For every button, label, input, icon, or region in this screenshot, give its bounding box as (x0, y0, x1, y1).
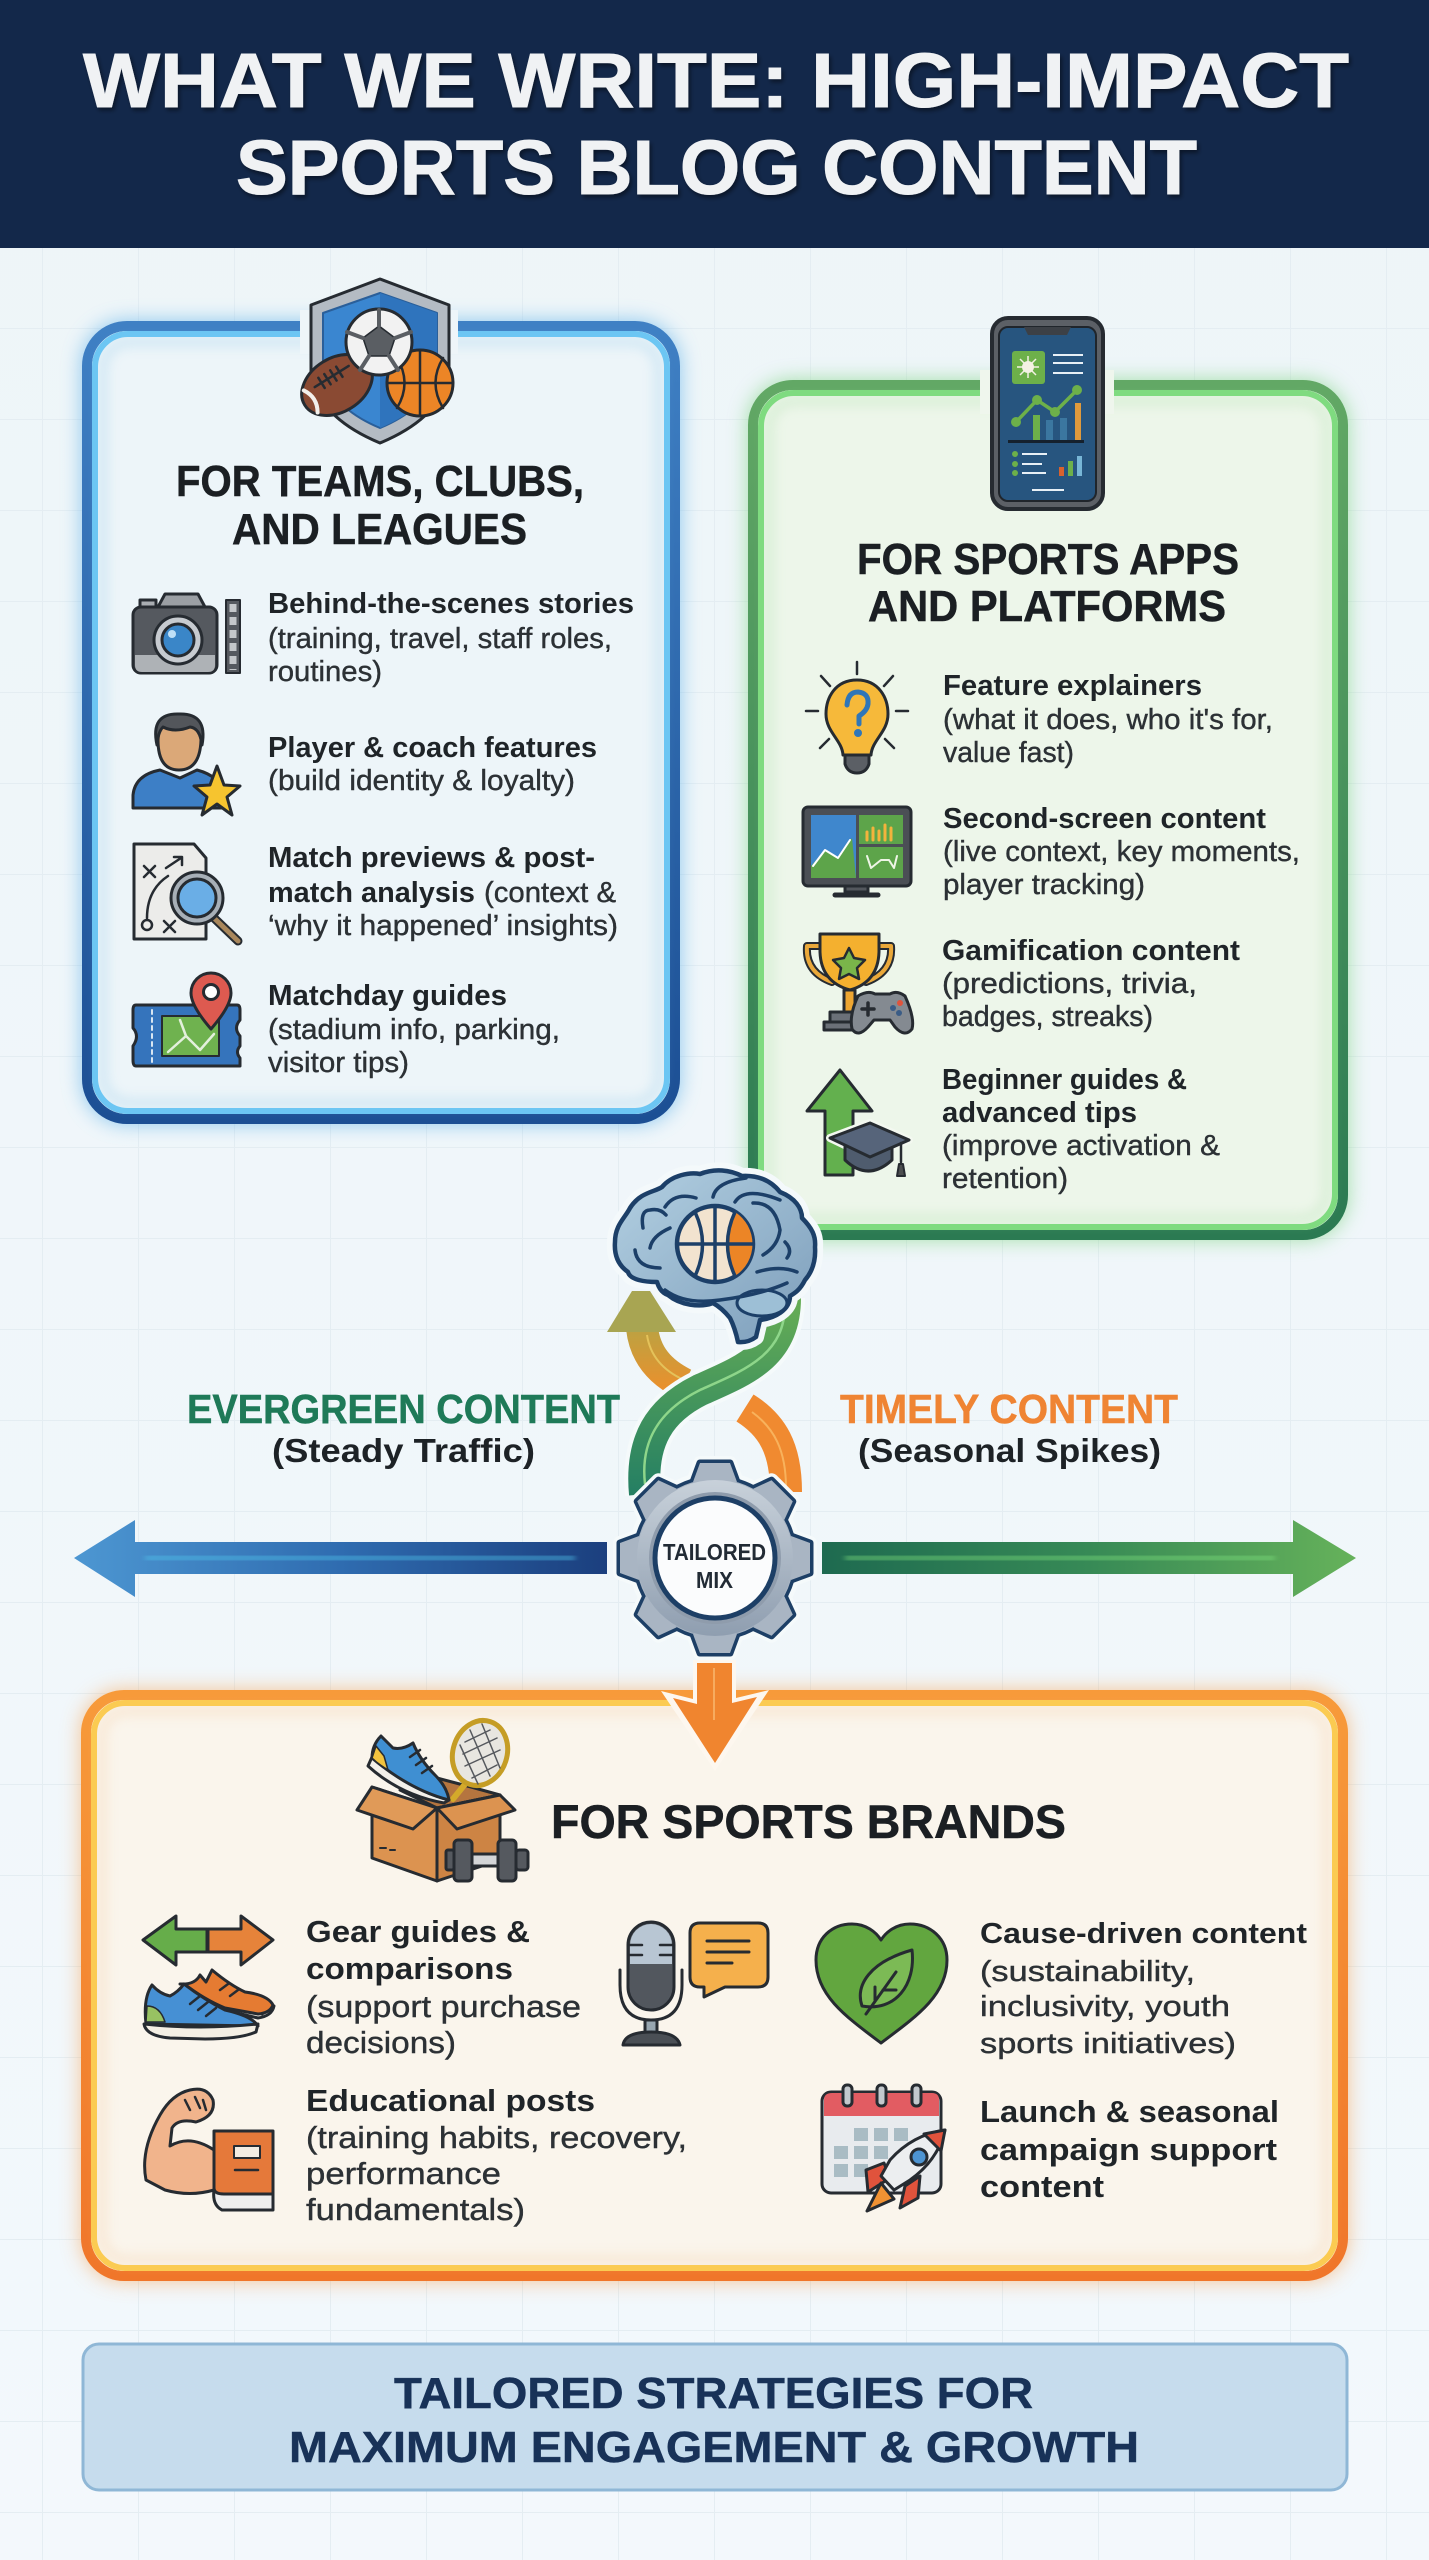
text: beginner guides and advanced tips: Beginner guides & (942, 1064, 1187, 1096)
panel: teams, clubs and leagues (82, 279, 680, 1124)
text: cause-driven content: Cause-driven content (980, 1918, 1307, 1950)
heading: for sports apps and platforms: FOR SPORTS APPS (857, 535, 1239, 584)
arrow: gold strand up to brain (607, 1291, 684, 1384)
text: feature explainers: value fast) (943, 737, 1074, 769)
icon: camera (133, 594, 240, 673)
footer banner: TAILORED STRATEGIES FOR (394, 2369, 1033, 2418)
panel: sports apps and platforms (748, 318, 1348, 1240)
text: gear guides and comparisons (306, 1914, 581, 2060)
label: evergreen content (187, 1386, 620, 1469)
heading: for teams, clubs, and leagues: FOR TEAMS, CLUBS, (176, 457, 584, 506)
arrow: left evergreen (74, 1520, 607, 1597)
text: educational posts: performance (306, 2156, 501, 2191)
panel frame green (748, 370, 1348, 1240)
heading: for sports apps and platforms: AND PLATFORMS (868, 582, 1226, 631)
text: behind-the-scenes stories: Behind-the-scenes stories (268, 588, 634, 620)
icon: comparison arrows and shoes (143, 1916, 274, 2039)
panel frame blue (82, 310, 680, 1124)
icon: trophy and game controller (807, 934, 913, 1033)
text: launch and seasonal campaign support content: Launch & seasonal (980, 2094, 1279, 2129)
icon: brain with basketball (615, 1170, 815, 1342)
strand: green (644, 1298, 785, 1494)
text: player and coach features: Player & coach features (268, 732, 597, 764)
icon: tailored mix gear: TAILORED (663, 1539, 766, 1565)
text: second-screen content: (live context, key moments, (943, 836, 1300, 868)
footer banner: MAXIMUM ENGAGEMENT & GROWTH (289, 2423, 1139, 2472)
text: second-screen content: player tracking) (943, 869, 1145, 901)
text: educational posts (306, 2083, 687, 2227)
icon: light bulb with question mark (806, 662, 908, 773)
heading: for sports brands: FOR SPORTS BRANDS (551, 1795, 1066, 1848)
icon: shield with balls (290, 279, 453, 443)
label: timely content (840, 1386, 1178, 1469)
text: feature explainers: Feature explainers (943, 670, 1202, 702)
label: timely content: (Seasonal Spikes) (858, 1432, 1161, 1469)
header band with title: SPORTS BLOG CONTENT (236, 125, 1197, 211)
text: cause-driven content: (sustainability, (980, 1956, 1195, 1988)
icon: microphone and speech bubble (620, 1922, 768, 2045)
text: beginner guides and advanced tips: advanced tips (942, 1097, 1137, 1129)
text: beginner guides and advanced tips: (improve activation & (942, 1130, 1220, 1162)
strand: orange (745, 1408, 786, 1492)
text: launch and seasonal campaign support content (980, 2094, 1279, 2204)
diagram: tailored mix centre (74, 1170, 1356, 1771)
text: match previews and post-match analysis: (context & (484, 877, 616, 909)
text: launch and seasonal campaign support content: content (980, 2169, 1104, 2204)
arrow: right timely (822, 1520, 1356, 1597)
text: cause-driven content (980, 1918, 1307, 2060)
icon: gear box (357, 1713, 528, 1881)
text: gear guides and comparisons: Gear guides & (306, 1914, 530, 1949)
icon: tailored mix gear (620, 1463, 810, 1653)
label: evergreen content: (Steady Traffic) (272, 1432, 535, 1469)
icon: calendar with rocket (822, 2085, 945, 2211)
text: matchday guides: (stadium info, parking, (268, 1014, 560, 1046)
panel: sports brands (81, 1690, 1348, 2281)
label: evergreen content: EVERGREEN CONTENT (187, 1386, 620, 1432)
icon: green heart with leaf (816, 1924, 947, 2043)
header band with title: WHAT WE WRITE: HIGH-IMPACT (83, 38, 1349, 124)
text: gamification content: badges, streaks) (942, 1001, 1153, 1033)
footer banner (83, 2344, 1347, 2490)
text: gamification content: Gamification content (942, 935, 1240, 967)
icon: monitor with live data (803, 807, 911, 895)
heading: for teams, clubs, and leagues: AND LEAGUES (232, 505, 527, 554)
text: second-screen content: Second-screen content (943, 803, 1266, 835)
icon: ticket map with pin (133, 973, 240, 1066)
text: cause-driven content: sports initiatives) (980, 2028, 1236, 2060)
icon: tactics board with magnifier (134, 844, 238, 941)
text: second-screen content (943, 803, 1300, 901)
text: behind-the-scenes stories (268, 588, 634, 688)
text: match previews and post-match analysis: match analysis (268, 877, 475, 909)
text: match previews and post-match analysis (268, 842, 618, 942)
text: player and coach features: (build identity & loyalty) (268, 765, 575, 797)
text: matchday guides: visitor tips) (268, 1047, 409, 1079)
text: matchday guides (268, 980, 560, 1079)
text: gear guides and comparisons: (support purchase (306, 1989, 581, 2024)
text: feature explainers (943, 670, 1273, 769)
text: gear guides and comparisons: comparisons (306, 1951, 513, 1986)
text: beginner guides and advanced tips: retention) (942, 1163, 1068, 1195)
text: matchday guides: Matchday guides (268, 980, 507, 1012)
text: beginner guides and advanced tips (942, 1064, 1220, 1195)
label: timely content: TIMELY CONTENT (840, 1386, 1178, 1432)
header band with title (0, 0, 1429, 248)
text: behind-the-scenes stories: routines) (268, 656, 382, 688)
text: cause-driven content: inclusivity, youth (980, 1991, 1230, 2023)
text: launch and seasonal campaign support content: campaign support (980, 2132, 1277, 2167)
text: feature explainers: (what it does, who it's for, (943, 704, 1273, 736)
text: behind-the-scenes stories: (training, travel, staff roles, (268, 623, 612, 655)
icon: flexed arm and book (145, 2089, 273, 2210)
icon: player with star (133, 714, 240, 815)
text: educational posts: (training habits, recovery, (306, 2120, 687, 2155)
text: gear guides and comparisons: decisions) (306, 2025, 456, 2060)
arrow: down into brands (661, 1660, 769, 1771)
text: match previews and post-match analysis: ‘why it happened’ insights) (268, 910, 618, 942)
icon: phone with dashboard (992, 318, 1103, 509)
heading: for sports apps and platforms (857, 535, 1239, 631)
text: player and coach features (268, 732, 597, 797)
panel frame orange (81, 1690, 1348, 2281)
text: match previews and post-match analysis: Match previews & post- (268, 842, 595, 874)
text: gamification content: (predictions, trivia, (942, 968, 1197, 1000)
heading: for teams, clubs, and leagues (176, 457, 584, 554)
text: educational posts: Educational posts (306, 2083, 595, 2118)
icon: growth arrow with graduation cap (807, 1070, 909, 1176)
text: educational posts: fundamentals) (306, 2192, 525, 2227)
icon: tailored mix gear: MIX (696, 1567, 734, 1593)
text: gamification content (942, 935, 1240, 1033)
